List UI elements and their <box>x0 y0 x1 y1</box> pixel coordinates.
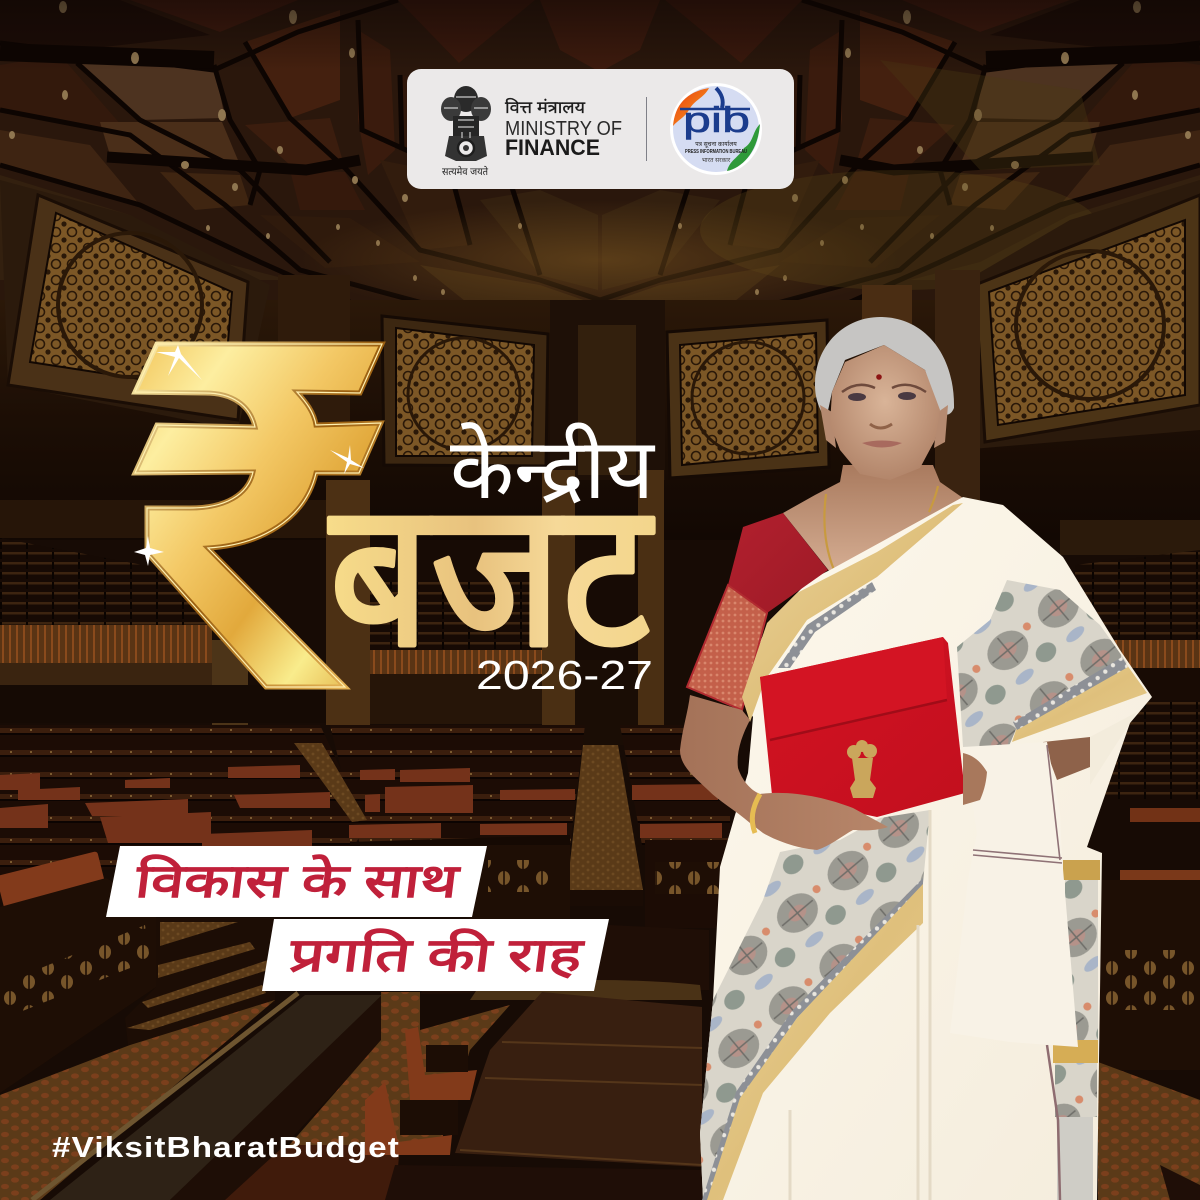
right forearm <box>1043 737 1090 780</box>
gallery seating right <box>664 520 1200 800</box>
icon: pib logo: भारत सरकार <box>702 158 731 164</box>
sari body <box>700 497 1152 1200</box>
small print border lower <box>702 878 923 1200</box>
icon: pib logo <box>670 83 762 175</box>
pillars <box>212 270 980 725</box>
title word: budget: बजट <box>329 461 654 689</box>
madhubani print upper <box>957 580 1127 760</box>
wall panel centre right <box>667 320 829 478</box>
logo panel <box>407 69 794 189</box>
icon: gold rupee symbol <box>134 344 382 687</box>
title word: kendriya: केन्द्रीय <box>450 422 655 516</box>
print border right <box>1013 657 1128 730</box>
floor benches <box>0 725 1200 919</box>
necklace <box>824 486 938 570</box>
tagline banner one <box>106 846 487 917</box>
blouse <box>728 513 828 613</box>
ears <box>820 405 948 448</box>
ministry name hindi: वित्त मंत्रालय <box>505 97 586 117</box>
sari madhubani border lower <box>700 810 930 1200</box>
eyes brows bindi mouth <box>842 374 926 448</box>
shoulder gold edge right <box>1012 665 1147 742</box>
sari pleat shading <box>790 810 930 1200</box>
wall panel right <box>975 195 1200 442</box>
red budget folder <box>760 637 965 817</box>
tagline banner one: विकास के साथ <box>133 854 462 907</box>
icon: gold emblem on folder <box>847 740 877 798</box>
icon: pib logo: pib <box>683 99 750 140</box>
neck and chest <box>783 465 963 572</box>
right side print panels <box>1053 860 1100 1200</box>
lower furniture and ornament panels <box>0 840 1200 1093</box>
print strip beside shoulder border <box>778 582 876 668</box>
right hand <box>963 753 987 805</box>
emblem motto: सत्यमेव जयते <box>442 165 489 178</box>
hair <box>815 317 954 420</box>
hashtag: #ViksitBharatBudget <box>52 1132 400 1164</box>
icon: pib logo: पत्र सूचना कार्यालय <box>695 140 737 149</box>
patterned sleeve <box>687 585 767 710</box>
white pallu <box>950 742 1078 1047</box>
left arm and hand <box>680 695 888 850</box>
gallery seating left <box>0 500 638 745</box>
figure: finance minister <box>680 317 1152 1200</box>
title year: 2026-27 <box>476 652 653 698</box>
icon: pib logo: PRESS INFORMATION BUREAU <box>685 149 747 155</box>
wall panel centre left <box>382 316 548 466</box>
tagline banner two: प्रगति की राह <box>287 928 587 981</box>
icon: national emblem <box>441 86 491 161</box>
finance word: FINANCE <box>505 135 600 160</box>
ceiling lotus coffers <box>0 0 1200 320</box>
sari gold border over shoulder <box>742 503 963 722</box>
wall panel left <box>8 195 248 420</box>
icon: bangle <box>752 794 760 833</box>
tagline banner two <box>262 919 609 991</box>
pallu embroidery <box>973 745 1062 863</box>
face <box>830 345 940 480</box>
sari embroidered vertical line <box>1047 1045 1060 1200</box>
sari gold border lower <box>707 884 923 1200</box>
sari sleeve under arm <box>1090 712 1137 785</box>
ministry name english: MINISTRY OF <box>505 118 622 140</box>
bottom floor carpet and table <box>0 992 1200 1200</box>
